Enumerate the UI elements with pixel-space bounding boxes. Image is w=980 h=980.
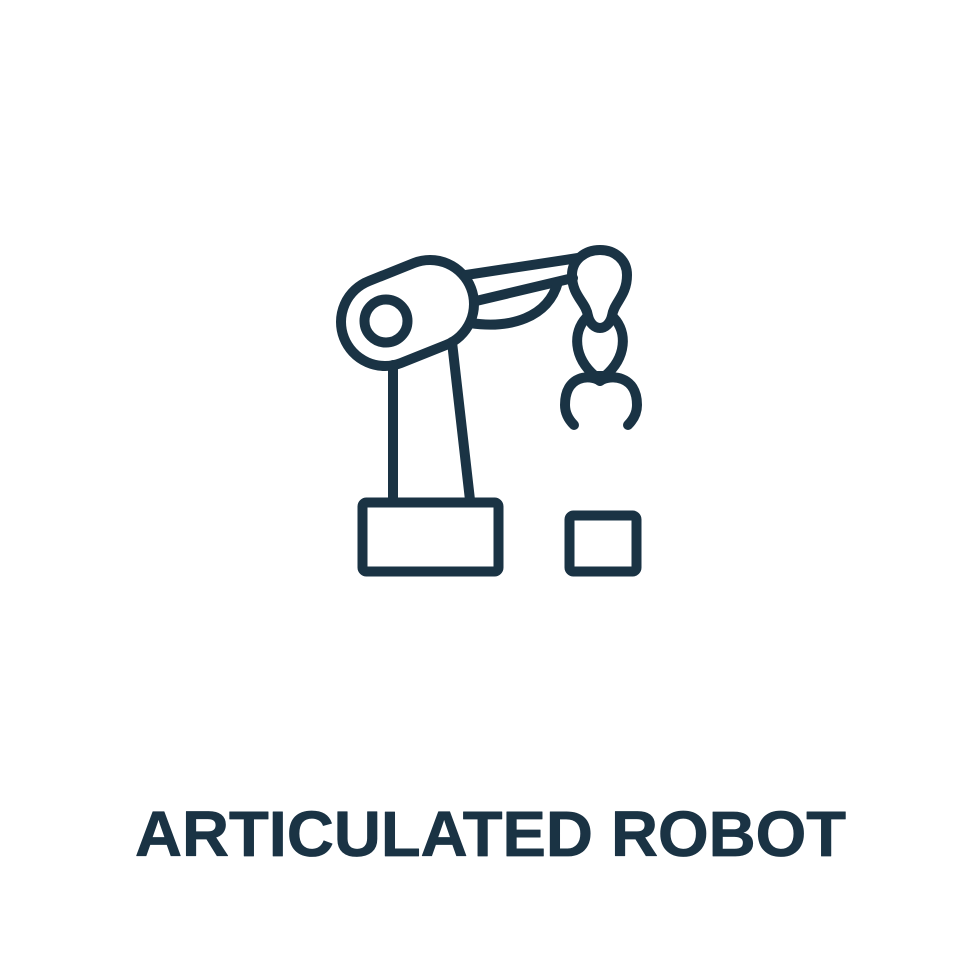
robot base bbox=[362, 502, 498, 572]
robot forearm bars bbox=[466, 258, 578, 325]
robot wrist joints bbox=[572, 250, 627, 376]
robot upper arm housing bbox=[341, 260, 474, 366]
robot gripper claw bbox=[565, 377, 637, 425]
workpiece box bbox=[570, 516, 636, 572]
title: ARTICULATED ROBOT bbox=[135, 798, 846, 870]
icon: articulated robot bbox=[341, 250, 637, 572]
robot support column bbox=[393, 342, 470, 500]
